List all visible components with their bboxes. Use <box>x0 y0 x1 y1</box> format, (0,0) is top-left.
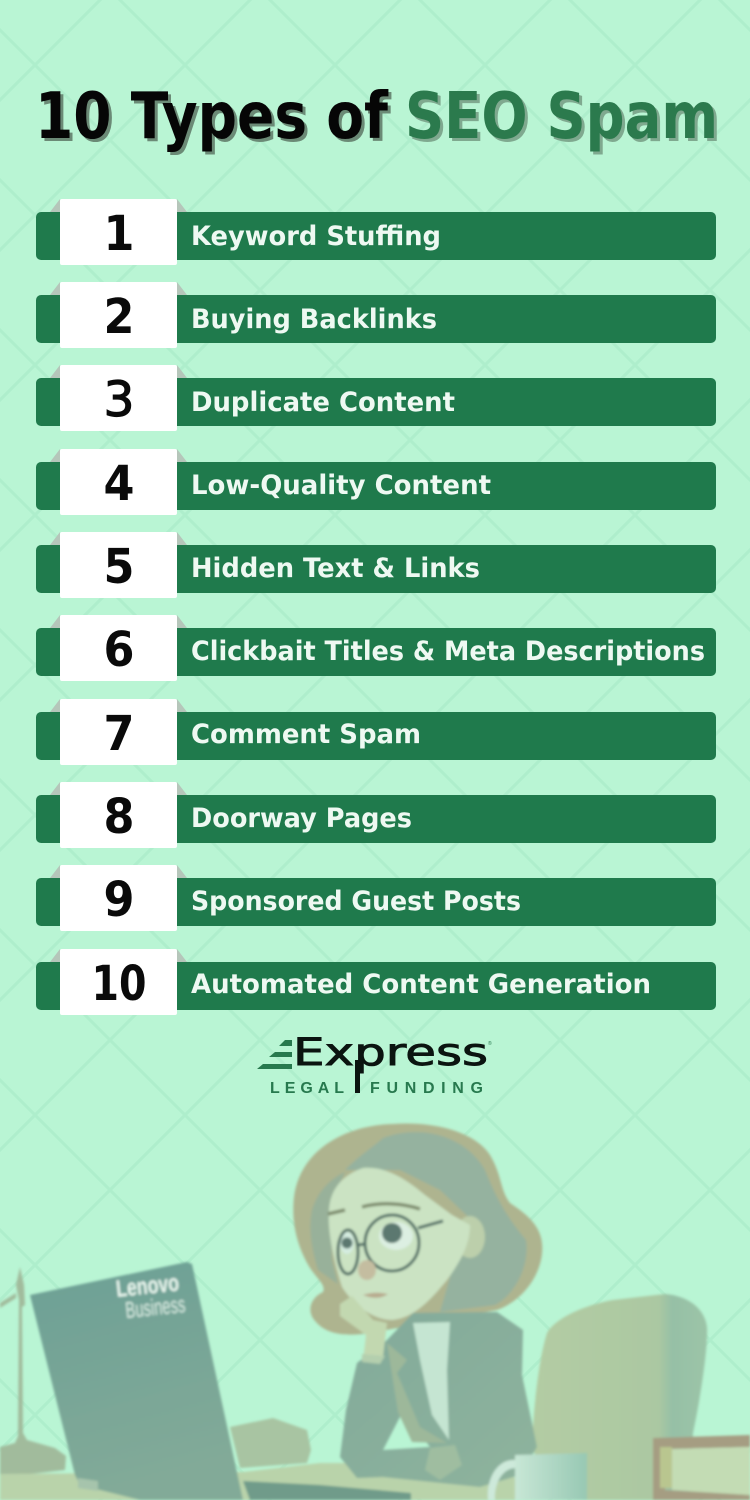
list item 7: 7 <box>104 706 134 762</box>
laptop brand text: Lenovo <box>115 1270 180 1303</box>
coffee mug <box>488 1453 587 1500</box>
office chair <box>532 1294 707 1500</box>
logo: Express Legal Funding: ® <box>488 1040 492 1047</box>
books <box>653 1435 750 1500</box>
list item 10 <box>36 949 716 1015</box>
woman <box>293 1124 542 1487</box>
desk <box>0 1463 750 1500</box>
shirt <box>413 1322 450 1440</box>
list item 6: 6 <box>104 622 134 678</box>
logo: Express Legal Funding <box>257 1031 492 1097</box>
list item 9: Sponsored Guest Posts <box>191 886 521 917</box>
jacket <box>340 1312 537 1487</box>
list item 5 <box>36 532 716 598</box>
logo: Express Legal Funding: Express <box>293 1031 488 1074</box>
ear <box>455 1216 485 1258</box>
list item 9: 9 <box>104 872 134 928</box>
list item 1 <box>36 199 716 265</box>
list item 4: Low-Quality Content <box>191 470 491 501</box>
keyboard <box>243 1481 411 1500</box>
laptop hinge <box>78 1478 98 1491</box>
stack of papers <box>230 1418 311 1468</box>
list item 4 <box>36 449 716 515</box>
hands on desk <box>425 1445 462 1480</box>
list item 7: Comment Spam <box>191 719 421 750</box>
hair shadow crown <box>345 1132 527 1312</box>
list item 5: 5 <box>104 539 134 595</box>
title: 10 Types of <box>35 80 389 154</box>
glasses <box>338 1215 443 1274</box>
list item 3: Duplicate Content <box>191 387 455 418</box>
list item 2 <box>36 282 716 348</box>
list item 1: 1 <box>104 206 134 262</box>
hand and forearm <box>340 1296 387 1361</box>
laptop <box>30 1262 243 1500</box>
laptop brand text: Business <box>124 1291 186 1323</box>
list item 6: Clickbait Titles & Meta Descriptions <box>191 636 705 667</box>
title: 10 Types of <box>38 83 392 157</box>
list item 8: 8 <box>104 789 134 845</box>
mouth <box>363 1293 388 1298</box>
list item 9 <box>36 865 716 931</box>
list item 1: Keyword Stuffing <box>191 221 441 252</box>
list item 2: Buying Backlinks <box>191 304 437 335</box>
title <box>35 80 721 157</box>
eyebrows <box>328 1204 420 1214</box>
list item 7 <box>36 699 716 765</box>
logo: Express Legal Funding: LEGAL <box>270 1080 344 1097</box>
hair shadow left <box>310 1172 345 1284</box>
desk lamp <box>0 1267 66 1474</box>
list item 10: 10 <box>92 956 146 1012</box>
face <box>329 1168 470 1320</box>
list item 10: Automated Content Generation <box>191 969 651 1000</box>
lapel <box>387 1343 447 1443</box>
nose <box>358 1260 376 1280</box>
list item 8 <box>36 782 716 848</box>
cuff <box>362 1354 385 1364</box>
illustration: desk scene <box>0 1124 750 1500</box>
eye <box>379 1222 413 1250</box>
list item 3 <box>36 365 716 431</box>
laptop brand text <box>115 1269 186 1324</box>
list item 2: 2 <box>104 289 134 345</box>
hair <box>293 1124 542 1335</box>
list item 6 <box>36 615 716 681</box>
list item 8: Doorway Pages <box>191 803 412 834</box>
list item 5: Hidden Text & Links <box>191 553 480 584</box>
list item 3: 3 <box>104 372 134 428</box>
list item 4: 4 <box>104 456 134 512</box>
logo: Express Legal Funding: FUNDING <box>370 1080 483 1097</box>
